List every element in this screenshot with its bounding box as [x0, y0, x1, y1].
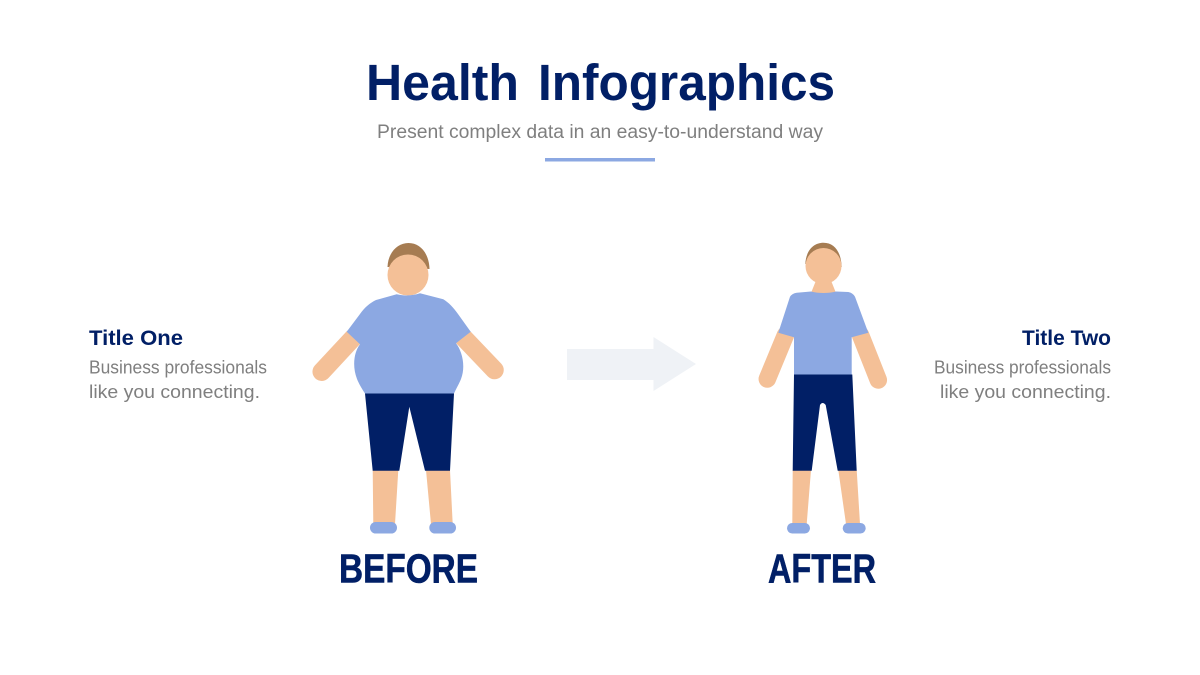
shirt	[778, 292, 868, 374]
label: before: BEFORE	[339, 546, 478, 592]
arrow	[567, 337, 696, 391]
figure: after	[767, 243, 878, 533]
shoes	[370, 522, 456, 534]
title: Health	[366, 54, 519, 111]
shorts	[793, 374, 857, 471]
hair	[805, 243, 842, 267]
text block: title two: like you connecting.	[940, 381, 1111, 402]
legs	[373, 470, 453, 524]
shoes	[787, 523, 866, 534]
head	[806, 248, 842, 284]
text block: title one: Business professionals	[89, 356, 267, 378]
label: after: AFTER	[768, 546, 876, 592]
neck	[811, 278, 836, 293]
figure: before	[322, 243, 494, 534]
legs	[792, 470, 860, 524]
title: Infographics	[538, 54, 835, 111]
arms	[322, 337, 494, 372]
shirt	[347, 293, 471, 394]
text block: title two	[934, 326, 1111, 402]
text block: title one: Title One	[89, 326, 183, 350]
text block: title two: Business professionals	[934, 356, 1111, 378]
title	[366, 54, 835, 111]
text block: title two: Title Two	[1022, 326, 1111, 350]
text block: title one: like you connecting.	[89, 381, 260, 402]
subtitle: Present complex data in an easy-to-understand way	[377, 122, 823, 143]
title underline	[545, 158, 655, 162]
hair	[388, 243, 430, 269]
head	[388, 254, 428, 296]
shorts	[365, 394, 454, 471]
arms	[767, 335, 878, 380]
text block: title one	[89, 326, 267, 402]
